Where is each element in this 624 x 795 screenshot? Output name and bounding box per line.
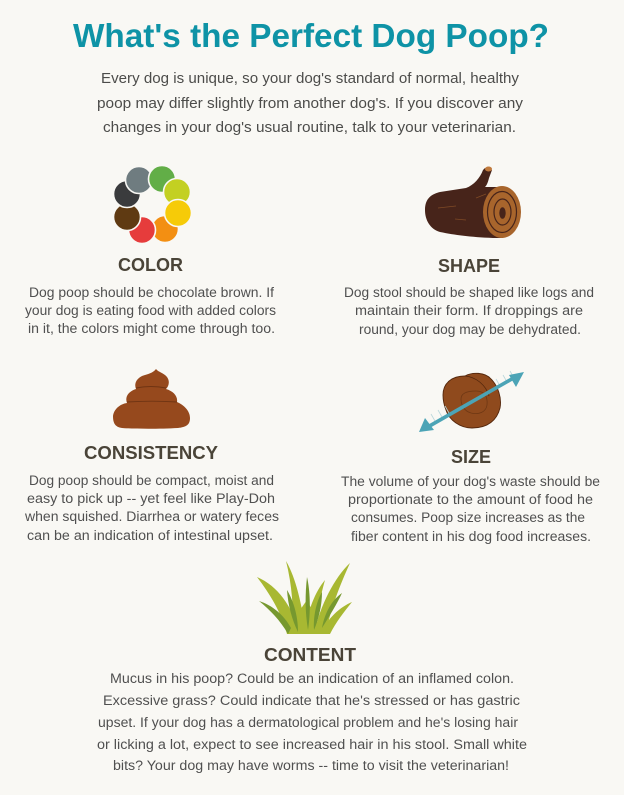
icon: color wheel	[114, 166, 192, 244]
icon: grass	[257, 561, 352, 634]
icon: log	[425, 166, 521, 238]
consistency description: Dog poop should be compact, moist and	[29, 473, 274, 488]
color description: in it, the colors might come through too.	[28, 321, 275, 336]
shape description: round, your dog may be dehydrated.	[359, 322, 581, 337]
size description: The volume of your dog's waste should be	[341, 474, 600, 489]
panel: size	[341, 371, 600, 544]
consistency description: when squished. Diarrhea or watery feces	[24, 509, 279, 524]
heading: size: SIZE	[451, 447, 491, 467]
consistency description: can be an indication of intestinal upset.	[27, 528, 273, 543]
size description: proportionate to the amount of food he	[348, 492, 593, 507]
shape description: Dog stool should be shaped like logs and	[344, 285, 594, 300]
color description	[25, 285, 276, 336]
intro text: poop may differ slightly from another dog's. If you discover any	[97, 95, 523, 112]
heading: content: CONTENT	[264, 645, 356, 665]
panel: consistency	[24, 369, 279, 543]
panel: content	[97, 561, 527, 773]
intro text: changes in your dog's usual routine, talk to your veterinarian.	[103, 119, 516, 136]
heading: color: COLOR	[118, 255, 183, 275]
icon: poop pile	[113, 369, 190, 429]
heading: shape: SHAPE	[438, 256, 500, 276]
size description: consumes. Poop size increases as the	[351, 510, 585, 525]
content description: upset. If your dog has a dermatological problem and he's losing hair	[98, 715, 519, 730]
consistency description: easy to pick up -- yet feel like Play-Doh	[27, 491, 275, 506]
size description: fiber content in his dog food increases.	[351, 529, 591, 544]
color description: your dog is eating food with added colors	[25, 303, 276, 318]
shape description	[344, 285, 594, 337]
intro text	[97, 70, 523, 136]
content description: Mucus in his poop? Could be an indication of an inflamed colon.	[110, 671, 514, 686]
shape description: maintain their form. If droppings are	[355, 303, 583, 318]
heading: consistency: CONSISTENCY	[84, 443, 218, 463]
panel: color	[25, 166, 276, 336]
intro text: Every dog is unique, so your dog's standard of normal, healthy	[101, 70, 519, 87]
content description: bits? Your dog may have worms -- time to visit the veterinarian!	[113, 758, 509, 773]
size description	[341, 474, 600, 544]
content description: Excessive grass? Could indicate that he's stressed or has gastric	[103, 693, 520, 708]
icon: coiled poop with measuring arrow	[419, 371, 524, 432]
content description: or licking a lot, expect to see increased hair in his stool. Small white	[97, 737, 527, 752]
panel: shape	[344, 166, 594, 337]
title: What's the Perfect Dog Poop?	[73, 17, 549, 54]
consistency description	[24, 473, 279, 543]
color description: Dog poop should be chocolate brown. If	[29, 285, 274, 300]
content description	[97, 671, 527, 773]
